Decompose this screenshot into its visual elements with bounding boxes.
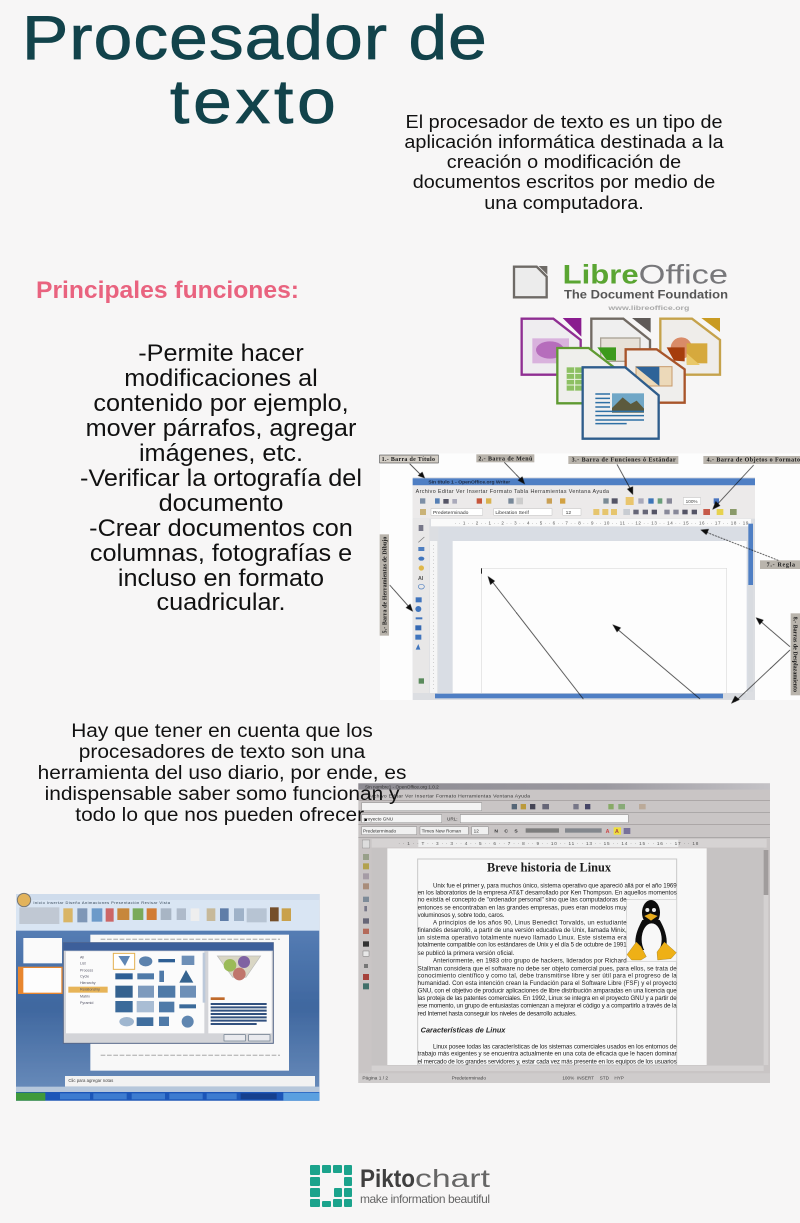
document body text xyxy=(418,882,677,1065)
document body text: Linux posee todas las características de los sistemas comerciales usados en los entornos de xyxy=(433,1043,677,1050)
document body text: A principios de los años 90, Linus Benedict Torvalds, un estudiante xyxy=(433,920,627,927)
image: OpenOffice Writer screenshot with callouts xyxy=(380,453,800,704)
SmartArt dialog: All xyxy=(80,956,84,960)
status bar: HYP xyxy=(614,1076,624,1081)
status bar: STD xyxy=(600,1076,610,1081)
title: texto xyxy=(170,66,336,136)
wordmark: make information beautiful xyxy=(360,1192,490,1206)
document body text: Stallman considera que el software no debe ser objeto comercial pues, para ellos, se trata de xyxy=(418,965,677,972)
icon: blue document xyxy=(583,367,659,439)
standard toolbar icons: 100% xyxy=(686,499,698,504)
wordmark: Pikto xyxy=(360,1165,415,1193)
title xyxy=(22,2,487,136)
status bar: Predeterminado xyxy=(452,1076,486,1082)
functions text block: -Verificar la ortografía del xyxy=(80,466,362,492)
formatting toolbar: Predeterminado xyxy=(433,510,469,516)
SmartArt dialog: Relationship xyxy=(80,988,100,992)
window frame and toolbars: Times New Roman xyxy=(422,829,461,834)
functions text block: columnas, fotografías e xyxy=(90,541,352,567)
status bar: 100% xyxy=(562,1076,574,1081)
icon: purple document xyxy=(522,318,581,375)
document body text: finlandés desarrolló, a partir de una versión educativa de Unix, llamada Minix, xyxy=(418,927,627,934)
status bar xyxy=(358,1073,770,1083)
window frame and toolbars: Sin nombre1 - OpenOffice.org 1.0.2 xyxy=(365,784,439,789)
closing text block: procesadores de texto son una xyxy=(79,742,366,763)
SmartArt dialog: Cycle xyxy=(80,974,89,978)
functions text block: documento xyxy=(159,491,283,517)
LibreOffice wordmark xyxy=(563,260,728,312)
ribbon icons xyxy=(19,907,291,924)
intro text block: aplicación informática destinada a la xyxy=(404,133,724,153)
document body text: se publicó la primera versión oficial. xyxy=(418,950,515,957)
intro text block: documentos escritos por medio de xyxy=(413,173,715,193)
callout labels: 1.- Barra de Título xyxy=(382,457,435,463)
window frame and toolbars: 12 xyxy=(474,829,479,834)
icon: green document xyxy=(557,347,616,403)
formatting toolbar: Liberation Serif xyxy=(495,510,529,516)
scrollbars xyxy=(748,524,753,585)
slide panel: Clic para agregar notas xyxy=(68,1078,113,1083)
callout labels: 2.- Barra de Menú xyxy=(478,457,533,463)
formatting toolbar: 12 xyxy=(566,510,571,516)
document heading: Breve historia de Linux xyxy=(487,861,612,875)
functions text block: modificaciones al xyxy=(124,366,318,392)
icon: yellow document xyxy=(660,318,720,375)
document page xyxy=(372,848,768,1071)
document body text: red Internet hasta conseguir los niveles de desarrollo actuales. xyxy=(418,1010,577,1017)
closing text block: Hay que tener en cuenta que los xyxy=(71,721,373,742)
formatting toolbar xyxy=(420,509,737,516)
functions text block: imágenes, etc. xyxy=(139,441,303,467)
window frame and toolbars: A xyxy=(615,829,619,835)
window frame and toolbars: Predeterminado xyxy=(363,829,397,834)
document body text: Características de Linux xyxy=(421,1026,506,1035)
document body text: totalmente compatible con los estándares de Unix y el día 5 de octubre de 1991 xyxy=(418,942,627,949)
closing text block xyxy=(38,721,406,826)
intro text block xyxy=(404,113,724,214)
window background xyxy=(16,893,319,1101)
SmartArt dialog xyxy=(63,943,273,1043)
application window: Sin título 1 - OpenOffice.org Writer xyxy=(428,480,510,486)
document body text: un sistema operativo totalmente nuevo llamado Linux. Este sistema era xyxy=(418,934,627,941)
functions text block: -Permite hacer xyxy=(138,341,304,367)
window frame and toolbars: A xyxy=(606,829,610,835)
SmartArt dialog: Hierarchy xyxy=(80,981,96,985)
document body text: humanidad. Con esta intención crean la Fundación para el Software Libre (FSF) y el proyecto xyxy=(418,980,677,987)
window background: Inicio Insertar Diseño Animaciones Presentación Revisar Vista xyxy=(33,900,171,905)
closing text block: indispensable saber somo funcionan y xyxy=(45,784,400,805)
functions text block: mover párrafos, agregar xyxy=(86,416,356,442)
functions text block: incluso en formato xyxy=(118,566,324,592)
image: PowerPoint SmartArt dialog screenshot xyxy=(16,893,319,1101)
taskbar xyxy=(16,1087,319,1101)
functions text block xyxy=(80,341,362,616)
window frame and toolbars: · · 1 · · T · · 3 · · 3 · · 4 · · 5 · · 6 · · 7 · · 8 · · 9 · · 10 · · 11 · · 13 · · 15 · · 14 · · 15 · · 16 · · 17 · · 18 xyxy=(398,841,699,846)
document body text: entonces se encontraban en las grandes empresas, pues eran modelos muy xyxy=(418,904,628,911)
callout labels: 4.- Barra de Objetos o Formato xyxy=(707,458,800,464)
wordmark: chart xyxy=(415,1165,490,1193)
icon: Tux penguin xyxy=(627,899,677,962)
document body text: trabajo más exigentes y se encuentra actualmente en una cota de eficacia que le hacen dominar xyxy=(418,1051,677,1058)
SmartArt dialog: List xyxy=(80,962,86,966)
status bar: Página 1 / 2 xyxy=(362,1076,388,1082)
application window xyxy=(413,477,755,700)
window frame and toolbars: proyecto GNU xyxy=(364,817,393,822)
icon: orange document xyxy=(626,347,685,403)
image: Writer document screenshot, Breve historia de Linux xyxy=(358,783,770,1083)
SmartArt dialog: Matrix xyxy=(80,994,90,998)
image: LibreOffice logo xyxy=(514,260,728,439)
document body text: no existía el concepto de "ordenador personal" sino que las computadoras de xyxy=(418,896,627,903)
window frame and toolbars: N C S xyxy=(494,829,518,835)
LibreOffice wordmark: www.libreoffice.org xyxy=(607,305,689,312)
application window: · · 1 · · 2 · · 1 · · 2 · · 3 · · 4 · · 5 · · 6 · · 7 · · 8 · · 9 · · 10 · · 11 · · 12 · · 13 · · 14 · · 15 · · 16 · · 17 · · 18 · 19 xyxy=(455,520,749,525)
ruler xyxy=(431,519,751,526)
document body text: GNU, con el objetivo de producir aplicaciones de libre distribución amparadas en una licencia que xyxy=(418,988,677,995)
page xyxy=(453,541,747,693)
document body text: las proteja de las patentes comerciales. En 1992, Linux se integra en el proyecto GNU y a partir de xyxy=(418,995,677,1002)
icon: LibreOffice document xyxy=(514,266,547,297)
document body text: ese momento, un grupo de entusiastas comienzan a mejorar el código y a compartirlo a través de la xyxy=(418,1003,677,1010)
application window: AI xyxy=(418,576,424,582)
icon: Piktochart mark xyxy=(310,1165,352,1207)
callout labels: 3.- Barra de Funciones ó Estándar xyxy=(572,458,676,464)
document body text: voluminosos y, sobre todo, caros. xyxy=(418,912,505,919)
window frame and toolbars: URL: xyxy=(447,817,458,822)
functions text block: -Crear documentos con xyxy=(89,516,353,542)
callout labels: 5.- Barra de Herramientas de Dibujo xyxy=(383,537,389,633)
callout labels xyxy=(380,454,800,695)
vertical ruler xyxy=(430,541,437,693)
document body text: Unix fue el primer y, para muchos único, sistema operativo que apareció allá por el año 1969 xyxy=(433,882,677,889)
document body text: conocimiento científico y como tal, debe transmitirse libre y ser útil para el progreso de la xyxy=(418,973,677,980)
callout labels: 8.- Barras de Desplazamiento xyxy=(791,617,797,692)
callout arrows xyxy=(390,462,790,704)
intro text block: creación o modificación de xyxy=(447,153,681,173)
icon: grey document xyxy=(591,318,651,375)
window frame and toolbars xyxy=(358,783,770,1083)
LibreOffice wordmark: Libre xyxy=(563,260,639,290)
wordmark xyxy=(360,1165,490,1206)
slide panel xyxy=(18,935,315,1087)
application window: Archivo Editar Ver Insertar Formato Tabla Herramientas Ventana Ayuda xyxy=(416,489,609,495)
callout labels: 7.- Regla xyxy=(767,563,795,569)
document body text: en los laboratorios de la empresa AT&T desarrollado por Ken Thompson. En aquellos momentos xyxy=(418,889,677,896)
document body text: Anteriormente, en 1983 otro grupo de hackers, liderados por Richard xyxy=(433,958,627,965)
functions text block: contenido por ejemplo, xyxy=(93,391,349,417)
LibreOffice wordmark: The Document Foundation xyxy=(564,288,728,301)
status bar: INSERT xyxy=(577,1076,594,1081)
standard toolbar icons xyxy=(420,497,719,505)
window frame and toolbars: Archivo Editar Ver Insertar Formato Herramientas Ventana Ayuda xyxy=(368,793,530,799)
SmartArt dialog: Pyramid xyxy=(80,1001,93,1005)
LibreOffice wordmark: Office xyxy=(639,260,728,290)
closing text block: todo lo que nos pueden ofrecer. xyxy=(75,805,369,826)
document body text: el mercado de los grandes servidores y, estar cada vez más presente en los equipos de los usuarios xyxy=(418,1058,677,1065)
footer logo: Piktochart xyxy=(310,1165,490,1207)
functions text block: cuadricular. xyxy=(156,590,286,616)
intro text block: El procesador de texto es un tipo de xyxy=(406,113,722,133)
SmartArt dialog: Process xyxy=(80,968,93,972)
drawing toolbar xyxy=(413,519,429,693)
closing text block: herramienta del uso diario, por ende, es xyxy=(38,763,406,784)
heading: principales funciones: Principales funciones: xyxy=(36,277,299,304)
intro text block: una computadora. xyxy=(484,194,644,214)
title: Procesador de xyxy=(22,2,487,72)
